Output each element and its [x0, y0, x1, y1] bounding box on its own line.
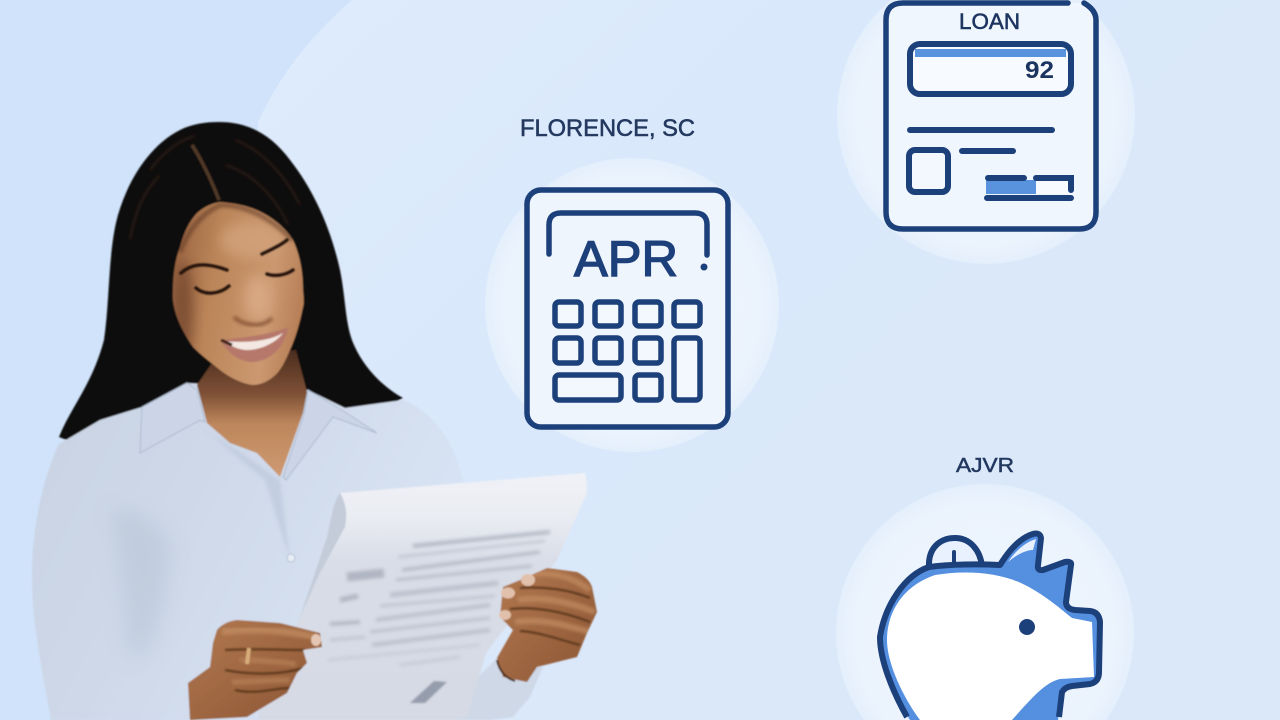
pig body fill	[880, 534, 1100, 720]
neck	[197, 350, 307, 477]
document text lines	[328, 532, 550, 665]
panel: loan document	[837, 0, 1135, 264]
barcode	[410, 681, 447, 703]
eyes	[196, 270, 293, 293]
panel: APR calculator	[485, 158, 779, 452]
icon: calculator	[527, 190, 728, 427]
right hand	[497, 568, 597, 682]
shirt	[32, 383, 464, 720]
city label: FLORENCE, SC	[520, 115, 695, 142]
halo circle	[485, 158, 779, 452]
pig outline	[880, 534, 1100, 717]
icon: piggy bank	[880, 534, 1100, 720]
left hand	[188, 620, 322, 720]
icon: loan form	[886, 3, 1096, 229]
mouth	[220, 327, 288, 362]
face	[171, 200, 306, 386]
amount text: 92	[1025, 57, 1054, 84]
paper curl	[300, 493, 346, 617]
AJVR label: AJVR	[956, 455, 1014, 477]
collar	[140, 383, 377, 480]
woman reading a document	[32, 122, 597, 720]
pig eye	[1019, 619, 1035, 635]
shirt placket shadow	[205, 430, 290, 560]
nose	[234, 317, 272, 325]
ear highlight	[1008, 539, 1036, 562]
halo circle	[837, 0, 1135, 264]
APR text: APR	[574, 231, 678, 287]
sleeve shading	[112, 508, 172, 660]
LOAN text: LOAN	[959, 9, 1020, 34]
pig body highlight	[887, 572, 1094, 720]
document	[257, 473, 587, 720]
parting	[192, 145, 219, 200]
hair	[59, 122, 403, 445]
panel: savings piggy bank	[836, 455, 1134, 720]
right sleeve	[435, 658, 543, 720]
eyebrows	[181, 240, 287, 273]
halo circle	[836, 484, 1134, 720]
shirt button	[287, 554, 295, 562]
